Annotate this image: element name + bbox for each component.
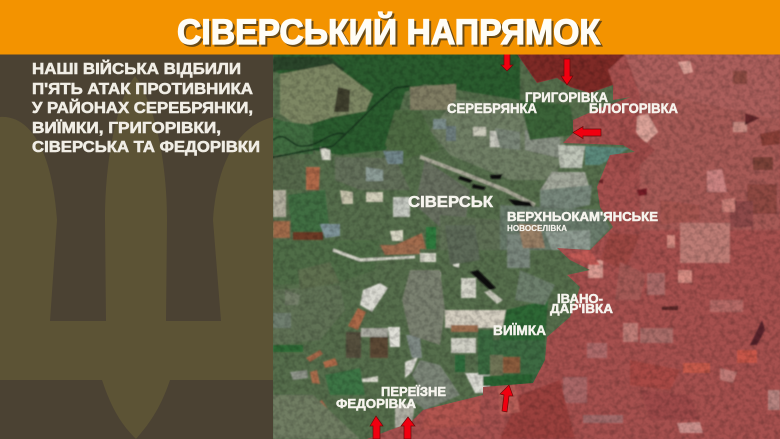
arrow: north toward Fedorivka — [370, 416, 383, 439]
label: Fedorivka: ФЕДОРІВКА — [336, 396, 417, 411]
icon: trident emblem watermark — [0, 76, 273, 439]
label: Ivano-Darivka: ДАР'ІВКА — [550, 301, 614, 316]
label: Vyimka: ВИЇМКА — [493, 323, 546, 338]
label: Hryhorivka: ГРИГОРІВКА — [525, 90, 608, 105]
label: Siversk: СІВЕРСЬК — [408, 194, 494, 211]
text block: summary of repelled attacks: СІВЕРСЬКА ТА ФЕДОРІВКИ — [32, 139, 260, 156]
label: Serebrianka: СЕРЕБРЯНКА — [447, 101, 537, 116]
title: СІВЕРСЬКИЙ НАПРЯМОК — [179, 14, 603, 54]
text block: summary of repelled attacks: ВИЇМКИ, ГРИГОРІВКИ, — [32, 120, 221, 137]
text block: summary of repelled attacks: П'ЯТЬ АТАК ПРОТИВНИКА — [32, 81, 253, 98]
arrow: west toward Bilohorivka — [573, 126, 601, 138]
arrow: north toward Pereizne — [401, 417, 415, 439]
label: Bilohorivka: БІЛОГОРІВКА — [589, 101, 678, 116]
text block: summary of repelled attacks: У РАЙОНАХ СЕРЕБРЯНКИ, — [32, 99, 253, 117]
text block: summary of repelled attacks — [32, 60, 260, 156]
text block: summary of repelled attacks: НАШІ ВІЙСЬКА ВІДБИЛИ — [32, 60, 241, 78]
label: Verkhnokamianske: ВЕРХНЬОКАМ'ЯНСЬКЕ — [507, 210, 658, 224]
label: Ivano-Darivka — [550, 294, 613, 316]
terrain: red occupied zone — [367, 54, 780, 439]
arrow: south toward Hryhorivka — [561, 59, 573, 85]
title: СІВЕРСЬКИЙ НАПРЯМОК — [177, 12, 601, 52]
left panel background — [0, 54, 273, 439]
map: satellite terrain — [270, 54, 780, 439]
arrow: north toward Vyimka — [500, 385, 513, 412]
label: Pereizne: ПЕРЕЇЗНЕ — [381, 384, 446, 399]
terrain: fields and forest on the Ukrainian-held side — [270, 54, 630, 439]
terrain: fine satellite texture — [273, 54, 780, 439]
arrow: north at Hryhorivka west — [501, 54, 513, 71]
label: Ivano-Darivka: ІВАНО- — [557, 291, 603, 306]
header band — [0, 0, 780, 54]
label: Novoselivka: НОВОСЕЛІВКА — [507, 223, 567, 233]
